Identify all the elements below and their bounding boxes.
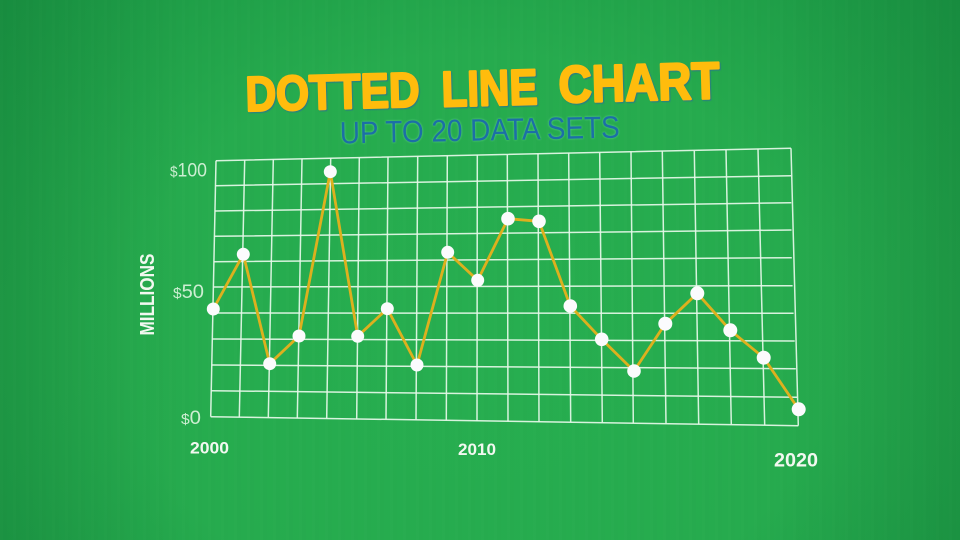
x-axis labels: 2010 [458,440,496,459]
title [245,52,720,122]
y-axis labels [170,160,207,429]
title: CHART [558,52,720,114]
chart [207,148,806,426]
data points [207,165,806,416]
subtitle: UP TO 20 DATA SETS [339,110,620,150]
grid [211,148,798,426]
y-axis title: MILLIONS [137,254,159,336]
data line [213,172,799,409]
title: LINE [441,59,538,117]
y-axis labels: $0 [181,407,201,429]
y-axis labels: $50 [173,281,204,303]
x-axis labels: 2000 [190,440,229,458]
x-axis labels [190,440,818,472]
title: DOTTED [245,63,420,122]
y-axis labels: $100 [170,160,207,182]
x-axis labels: 2020 [774,450,818,472]
